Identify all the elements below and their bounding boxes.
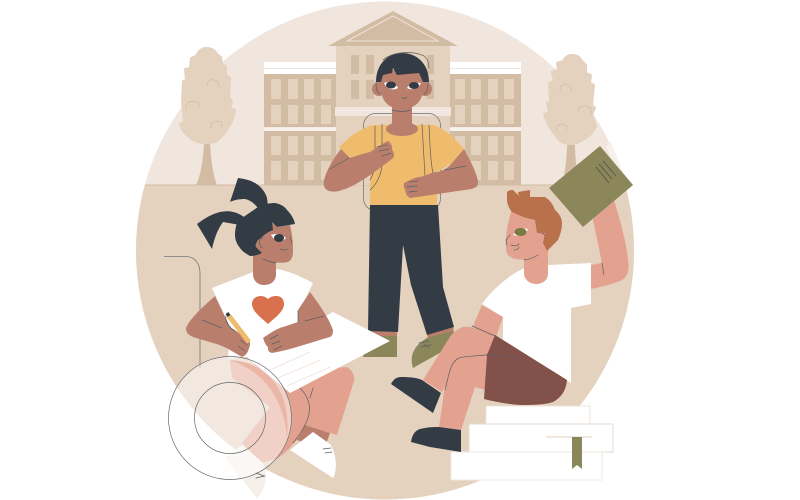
- ponytails: [197, 178, 268, 249]
- top book: [486, 406, 590, 424]
- school building: [264, 11, 521, 185]
- right wing: [450, 62, 521, 185]
- tree right: [544, 55, 596, 175]
- white t-shirt: [482, 263, 591, 383]
- arm right: [263, 292, 333, 353]
- head: [372, 53, 432, 112]
- shoes: [363, 325, 454, 368]
- wheelchair handle: [164, 256, 200, 368]
- bottom book: [451, 452, 602, 480]
- white shoe: [290, 432, 336, 478]
- left arm: [473, 305, 503, 337]
- front leg: [439, 355, 487, 430]
- boy sitting: [391, 146, 633, 452]
- stack of books: [451, 406, 613, 480]
- book held up: [549, 146, 633, 227]
- backpack outline: [364, 114, 440, 210]
- left wing: [264, 62, 336, 185]
- roof pediment: [328, 11, 458, 46]
- background circle: [130, 2, 640, 500]
- eyes: [384, 82, 421, 89]
- boy standing: [324, 53, 478, 368]
- eye: [271, 234, 286, 241]
- dark shoes: [391, 377, 461, 452]
- white t-shirt: [212, 269, 313, 358]
- near leg: [230, 360, 313, 463]
- trousers: [368, 205, 454, 335]
- middle book: [469, 424, 613, 452]
- arm left: [186, 296, 250, 357]
- neck: [253, 250, 276, 285]
- translucent footrest shoe: [225, 445, 266, 498]
- far leg: [296, 367, 354, 447]
- arm right: [404, 149, 478, 198]
- back leg: [423, 327, 495, 392]
- neck: [386, 104, 418, 136]
- heart: [252, 296, 284, 324]
- wheel rim lines: [168, 356, 292, 480]
- paper: [247, 312, 390, 393]
- hair: [235, 203, 295, 256]
- hair: [507, 190, 562, 251]
- face: [235, 203, 295, 263]
- backpack straps: [370, 124, 433, 190]
- hair: [376, 53, 429, 82]
- wheel disc: [168, 356, 292, 480]
- pencil: [226, 313, 249, 342]
- tree left: [180, 48, 235, 185]
- eye: [513, 228, 528, 236]
- darker crescent of thigh through wheel: [230, 360, 288, 438]
- raised arm: [591, 200, 629, 289]
- t-shirt: [339, 125, 464, 205]
- shorts: [484, 335, 567, 405]
- neck and head: [506, 208, 550, 284]
- central block: [335, 46, 451, 185]
- girl in wheelchair: [168, 178, 390, 498]
- bookmark: [572, 437, 582, 469]
- pale strip on circle edge: [606, 142, 630, 190]
- arm left: [324, 141, 394, 192]
